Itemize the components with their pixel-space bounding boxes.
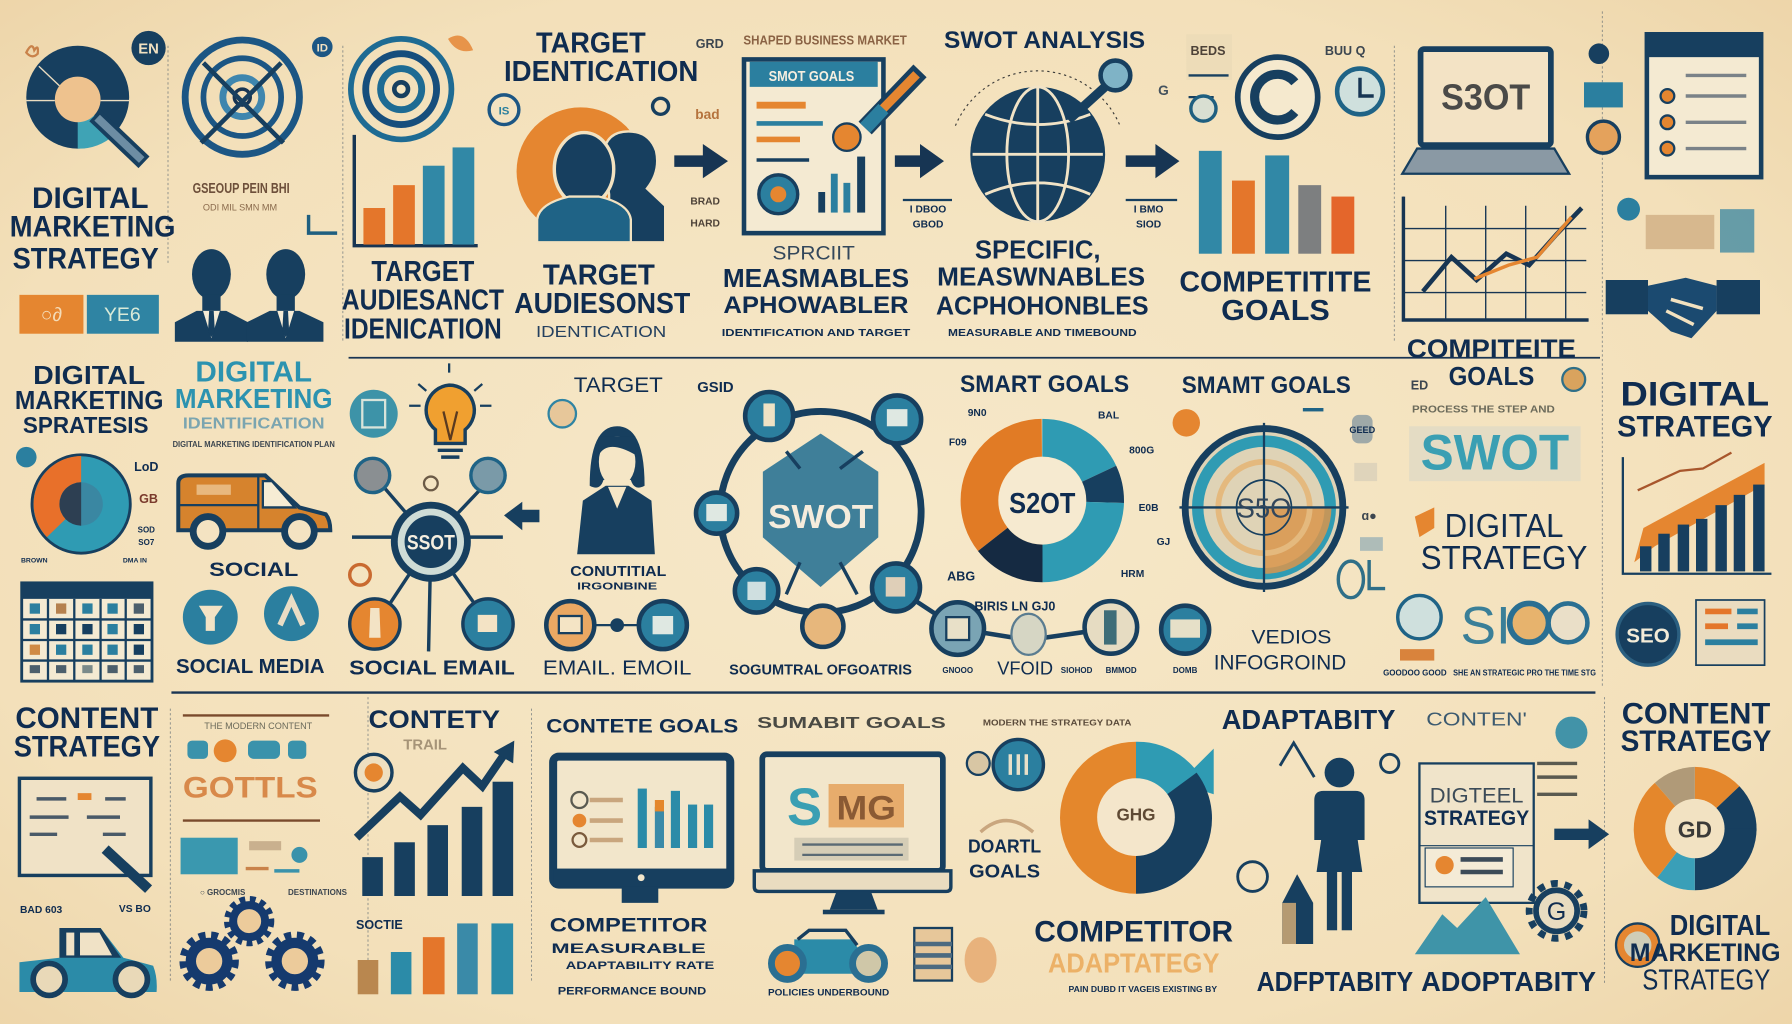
heading: competitive goals: COMPETITITE (1179, 266, 1371, 298)
garbled top: CONTEN' (1426, 709, 1527, 730)
icon: squiggle (26, 46, 38, 56)
captions by globe: GBOD (913, 219, 943, 230)
heading: smart goals (960, 371, 1351, 399)
label: videos infographics: INFOGROIND (1214, 650, 1346, 675)
donut labels: 9N0 (968, 408, 987, 419)
heading: digital marketing teal: MARKETING (175, 383, 333, 414)
labels: email: EMAIL. EMOIL (543, 656, 691, 679)
icon: clock (1337, 69, 1383, 114)
heading: target (574, 372, 734, 397)
caption row: GNOOO (942, 666, 973, 675)
icon: blue target (351, 39, 451, 139)
icon: orange figure (965, 937, 997, 983)
small caption (193, 181, 290, 212)
pie labels: LoD (134, 460, 158, 474)
icon: pin (1173, 409, 1200, 437)
icon: small badge: EN (138, 42, 159, 58)
caption top: MODERN THE STRATEGY DATA (983, 719, 1132, 728)
caption row: BMMOD (1106, 666, 1137, 675)
icon: small round: IS (499, 105, 510, 117)
heading: adaptability: ADAPTABITY (1222, 704, 1395, 735)
icon: small top bits: GRD (696, 37, 724, 51)
donut chart: right (1634, 767, 1757, 890)
icon: small top bits: BRAD (690, 197, 720, 208)
icon: laptop (1402, 49, 1569, 174)
caption: IRGONBINE (577, 582, 657, 593)
heading: specific: SPECIFIC, (975, 234, 1101, 264)
heading: target audience 2: AUDIESONST (514, 288, 691, 320)
document icon (19, 778, 151, 889)
heading: target audience 2: IDENTICATION (536, 324, 666, 341)
caption row: VFOID (997, 657, 1053, 678)
caption row: SIOHOD (1061, 666, 1093, 675)
garbled block: DESTINATIONS (288, 888, 348, 897)
small caption: GSEOUP PEIN BHI (193, 181, 290, 197)
label: social: SOCIAL (209, 559, 298, 581)
arrow (1554, 819, 1609, 849)
scraps above swot: PROCESS THE STEP AND (1412, 405, 1555, 416)
donut labels: E0B (1139, 503, 1159, 514)
heading: competitor adaptability (1034, 916, 1233, 994)
chart: rising bars (1623, 453, 1771, 574)
heading: digital strategy right (1617, 376, 1773, 444)
pie labels: GB (139, 492, 158, 506)
arrow (895, 144, 944, 178)
heading: specific measurable (723, 242, 909, 319)
icon: copyright (1238, 57, 1318, 137)
heading: content goals: SUMABIT GOALS (757, 715, 946, 732)
pie labels: DMA IN (123, 557, 147, 564)
icons: social (183, 586, 319, 645)
heading: competitor adaptability: PAIN DUBD IT VAGEIS EXISTING BY (1069, 985, 1218, 994)
heading: content strategy right: CONTENT (1622, 697, 1770, 730)
caption above car: BAD 603 (20, 905, 63, 916)
icon: monitor smog: MG (837, 789, 896, 827)
small badge (1616, 923, 1659, 967)
icon: lightbulb (409, 363, 491, 457)
icon: scraps near copyright: G (1158, 83, 1169, 98)
heading: digital marketing strategy (10, 182, 175, 276)
icon: seo row (1398, 595, 1587, 661)
small bars: SOCTIE (356, 918, 403, 932)
caption row: SOGUMTRAL OFGOATRIS (729, 662, 912, 678)
heading: digital marketing teal (173, 357, 335, 449)
heading: smart goals: SMAMT GOALS (1182, 372, 1351, 399)
label: competitor text: MEASURABLE (551, 941, 706, 956)
icon: compass target: S5O (1237, 493, 1291, 524)
heading: target audience: TARGET (371, 256, 475, 288)
icon: orange hand (1415, 507, 1434, 537)
captions by globe: I BMO (1134, 205, 1163, 216)
heading: digital marketing (15, 360, 163, 438)
icon: small c circle (355, 754, 392, 791)
heading: content strategy: STRATEGY (14, 731, 160, 764)
heading: content strategy right: STRATEGY (1621, 725, 1772, 758)
captions by globe: SIOD (1136, 219, 1161, 230)
label: social email: SOCIAL EMAIL (349, 656, 515, 679)
heading: content strategy: CONTENT (15, 702, 158, 735)
heading: content goals (546, 715, 946, 738)
pie labels: BROWN (21, 557, 48, 564)
icon: van (178, 475, 330, 546)
icons: small circles (350, 390, 576, 438)
icon: pickup car (19, 928, 157, 995)
pie labels (21, 460, 158, 564)
heading: digital strategy: DIGITAL (1445, 508, 1563, 545)
heading: content: CONTETY (369, 706, 500, 734)
icon: seo badge: SEO (1626, 624, 1670, 647)
heading: digital strategy right: STRATEGY (1617, 411, 1773, 444)
icon: crossed target (185, 40, 299, 154)
card: digitee strategy: DIGTEEL (1430, 782, 1523, 807)
captions: MEASURABLE AND TIMEBOUND (948, 328, 1137, 339)
donut labels: ABG (947, 570, 975, 584)
icon: calendar (22, 583, 152, 681)
donut labels: BAL (1098, 410, 1119, 421)
tag boxes: ○∂ (41, 304, 62, 326)
icon: laptop: S3OT (1441, 77, 1530, 118)
icon: small top bits: bad (695, 107, 720, 122)
gears (183, 899, 321, 987)
panel: top row (10, 27, 1761, 391)
heading: smart goals: SMART GOALS (960, 371, 1129, 398)
icon: scraps near copyright (1158, 34, 1366, 121)
heading: content strategy right (1621, 697, 1772, 758)
heading: specific: MEASWNABLES (937, 262, 1145, 292)
label: competitor text (550, 914, 715, 997)
icon: audience silhouettes (517, 107, 665, 242)
bars (1199, 151, 1354, 254)
icon: scraps near copyright: BEDS (1191, 44, 1225, 58)
caption under scooter: POLICIES UNDERBOUND (768, 987, 890, 997)
icon: dashboard (1696, 600, 1765, 665)
heading: target: GSID (697, 380, 734, 396)
heading: adaptability lower: ADOPTABITY (1421, 966, 1596, 997)
label: videos infographics (1214, 626, 1346, 675)
heading: competitor adaptability: COMPETITOR (1034, 916, 1233, 949)
icon: scooter (771, 930, 885, 979)
icon: orange shape (448, 36, 473, 51)
heading: competitive goals 2: COMPITEITE (1407, 334, 1576, 364)
row dividers (168, 11, 1605, 983)
donut chart: right: GD (1678, 817, 1712, 843)
garbled block: THE MODERN CONTENT (204, 721, 313, 731)
icon: small doc (1584, 43, 1623, 153)
heading: digital marketing strategy lower: MARKETING (1630, 939, 1781, 967)
arrow (674, 144, 728, 178)
caption row (729, 599, 1198, 678)
heading: content: TRAIL (403, 738, 447, 754)
donut chart: s2ot (979, 438, 1105, 563)
icons + label: donut goals (967, 739, 1043, 882)
heading: digital marketing teal: IDENTIFICATION (183, 416, 325, 433)
scraps above swot (1411, 368, 1585, 416)
node chain (914, 600, 1209, 655)
icon: woman (577, 426, 655, 554)
chart: growth (357, 741, 514, 896)
captions under seo (1383, 668, 1596, 677)
icon: L shape (309, 215, 337, 233)
caption row: BIRIS LN GJ0 (974, 599, 1055, 613)
captions by globe (903, 200, 1177, 230)
donut labels: 800G (1129, 446, 1154, 457)
small caption: ODI MIL SMN MM (203, 202, 277, 212)
badge: swot: SWOT (1421, 424, 1569, 481)
icon: compass target (1179, 423, 1349, 592)
caption above car (20, 904, 151, 916)
heading: target: TARGET (574, 372, 663, 397)
scraps right of compass (1303, 408, 1385, 598)
heading: specific measurable: SPRCIIT (773, 242, 855, 264)
heading: digital strategy right: DIGITAL (1621, 376, 1769, 414)
icon: small badge (312, 37, 333, 57)
icon: small badge (131, 31, 166, 65)
scraps above swot: ED (1411, 379, 1428, 393)
tag boxes (19, 295, 159, 334)
heading: adaptability lower: ADFPTABITY (1257, 966, 1413, 997)
icon: small panel (1617, 198, 1754, 253)
icon: two business people (175, 249, 323, 342)
captions: IDENTIFICATION AND TARGET (722, 328, 911, 339)
scraps right of compass: ɑ● (1362, 509, 1377, 523)
caption: top line: SHAPED BUSINESS MARKET (743, 34, 907, 48)
heading: digital marketing strategy: MARKETING (10, 211, 175, 244)
pie labels: SOD (138, 526, 155, 535)
heading: competitive goals (1179, 266, 1371, 327)
icon: scraps near copyright: BUU Q (1325, 44, 1366, 58)
icon: email nodes (546, 601, 687, 649)
swot ring (696, 392, 921, 647)
caption (570, 564, 666, 593)
garbled block: GOTTLS (183, 772, 318, 805)
heading: target audience 2 (514, 260, 691, 341)
heading: digital strategy (1421, 508, 1587, 577)
heading: digital marketing teal: DIGITAL MARKETING IDENTIFICATION PLAN (173, 440, 335, 449)
icon: monitor smog (754, 754, 951, 914)
icon: small badge: ID (317, 42, 328, 54)
icon: globe (955, 61, 1130, 222)
icon: seo row: SI (1461, 596, 1511, 655)
donut chart: adaptability (1060, 742, 1214, 894)
icon: handshake (1606, 278, 1760, 338)
garbled block: ○ GROCMIS (200, 888, 246, 897)
heading: content (369, 706, 500, 754)
captions under seo: GOODOO GOOD (1383, 668, 1447, 677)
icon: small round (489, 95, 519, 125)
garbled block (181, 715, 348, 897)
heading: digital marketing: SPRATESIS (23, 412, 149, 438)
heading: specific: ACPHOHONBLES (936, 290, 1149, 320)
card: digitee strategy: STRATEGY (1424, 805, 1530, 830)
heading: competitive goals 2 (1407, 334, 1576, 391)
label: competitor text: PERFORMANCE BOUND (558, 985, 706, 997)
panel: bottom row (14, 697, 1781, 997)
label: social media: SOCIAL MEDIA (176, 655, 325, 678)
donut labels: GJ (1157, 537, 1170, 548)
captions by globe: I DBOO (910, 205, 946, 216)
card: digitee strategy (1419, 763, 1534, 903)
donut pie (32, 455, 130, 553)
heading: digital marketing: DIGITAL (33, 360, 145, 390)
donut labels (947, 408, 1170, 584)
heading: target identification (504, 28, 698, 88)
icon: seo badge (1617, 603, 1679, 665)
arrow (1126, 144, 1179, 178)
icon: mountains (1415, 897, 1520, 954)
heading: target audience 2: TARGET (543, 260, 655, 292)
bar chart (354, 135, 478, 246)
icon: swot network (350, 458, 513, 651)
icon: small top bits (653, 37, 724, 229)
arrow (504, 502, 539, 530)
swot ring: SWOT (768, 499, 873, 536)
heading: target identification: IDENTICATION (504, 56, 698, 88)
heading: competitive goals: GOALS (1221, 295, 1330, 327)
captions under seo: SHE AN STRATEGIC PRO THE TIME STG (1453, 668, 1596, 677)
clipboard: smart goals: SMOT GOALS (769, 69, 854, 85)
heading: target audience (342, 256, 504, 345)
icon: person (1314, 758, 1365, 930)
heading: specific measurable: APHOWABLER (723, 292, 909, 319)
icon: monitor bars (553, 757, 730, 903)
panel: middle row (15, 357, 1773, 681)
heading: specific measurable: MEASMABLES (723, 263, 909, 293)
heading: target audience: IDENICATION (344, 313, 502, 345)
heading: content goals: CONTETE GOALS (546, 716, 738, 738)
caption row: DOMB (1173, 666, 1198, 675)
heading: digital marketing strategy lower (1630, 910, 1781, 997)
icon: checklist document (1647, 34, 1761, 177)
small bars (356, 918, 513, 994)
icon: pie with magnifier (26, 46, 144, 162)
label: competitor text: ADAPTABILITY RATE (566, 960, 715, 972)
donut chart: adaptability: GHG (1116, 805, 1156, 825)
heading: digital marketing: MARKETING (15, 385, 163, 415)
label: videos infographics: VEDIOS (1251, 626, 1331, 648)
icon: small teal badge (16, 447, 37, 467)
donut chart: s2ot: S2OT (1009, 488, 1076, 520)
label: competitor text: COMPETITOR (550, 914, 707, 936)
heading: digital strategy: STRATEGY (1421, 540, 1587, 577)
icons + label: donut goals: GOALS (969, 861, 1040, 882)
heading: competitive goals 2: GOALS (1449, 361, 1534, 391)
caption: CONUTITIAL (570, 564, 666, 580)
icon: swot network: SSOT (407, 530, 455, 555)
caption above car: VS BO (119, 904, 151, 915)
icon: gear: G (1547, 898, 1566, 926)
line chart (1403, 197, 1589, 320)
heading: content strategy (14, 702, 160, 764)
heading: digital marketing teal: DIGITAL (195, 357, 312, 389)
icons + label: donut goals: DOARTL (968, 836, 1041, 857)
captions (722, 328, 1137, 339)
heading: digital marketing strategy lower: STRATEGY (1642, 965, 1770, 997)
icon: small tower (1282, 874, 1313, 944)
clipboard: smart goals (744, 59, 920, 233)
donut labels: HRM (1121, 569, 1144, 580)
heading: competitor adaptability: ADAPTATEGY (1048, 948, 1219, 979)
icon: small pin + mountains (1238, 743, 1399, 891)
tag boxes: YE6 (104, 304, 141, 326)
heading: digital marketing strategy lower: DIGITAL (1670, 910, 1770, 942)
heading: digital marketing strategy: DIGITAL (32, 182, 149, 215)
heading: adaptability lower (1257, 966, 1596, 997)
heading: target audience: AUDIESANCT (342, 285, 504, 317)
scraps right of compass: GEED (1349, 425, 1376, 435)
heading: target identification: TARGET (536, 28, 646, 60)
garbled top (1426, 709, 1587, 794)
donut labels: F09 (949, 438, 967, 449)
heading: digital marketing strategy: STRATEGY (13, 243, 159, 276)
heading: specific (936, 234, 1149, 320)
pie labels: SO7 (138, 538, 155, 547)
icon: small top bits: HARD (690, 218, 720, 229)
icon: striped doc (914, 928, 952, 981)
icon: gear (1529, 883, 1584, 938)
heading: swot analysis: SWOT ANALYSIS (944, 27, 1145, 54)
icon: monitor smog: S (787, 778, 822, 837)
